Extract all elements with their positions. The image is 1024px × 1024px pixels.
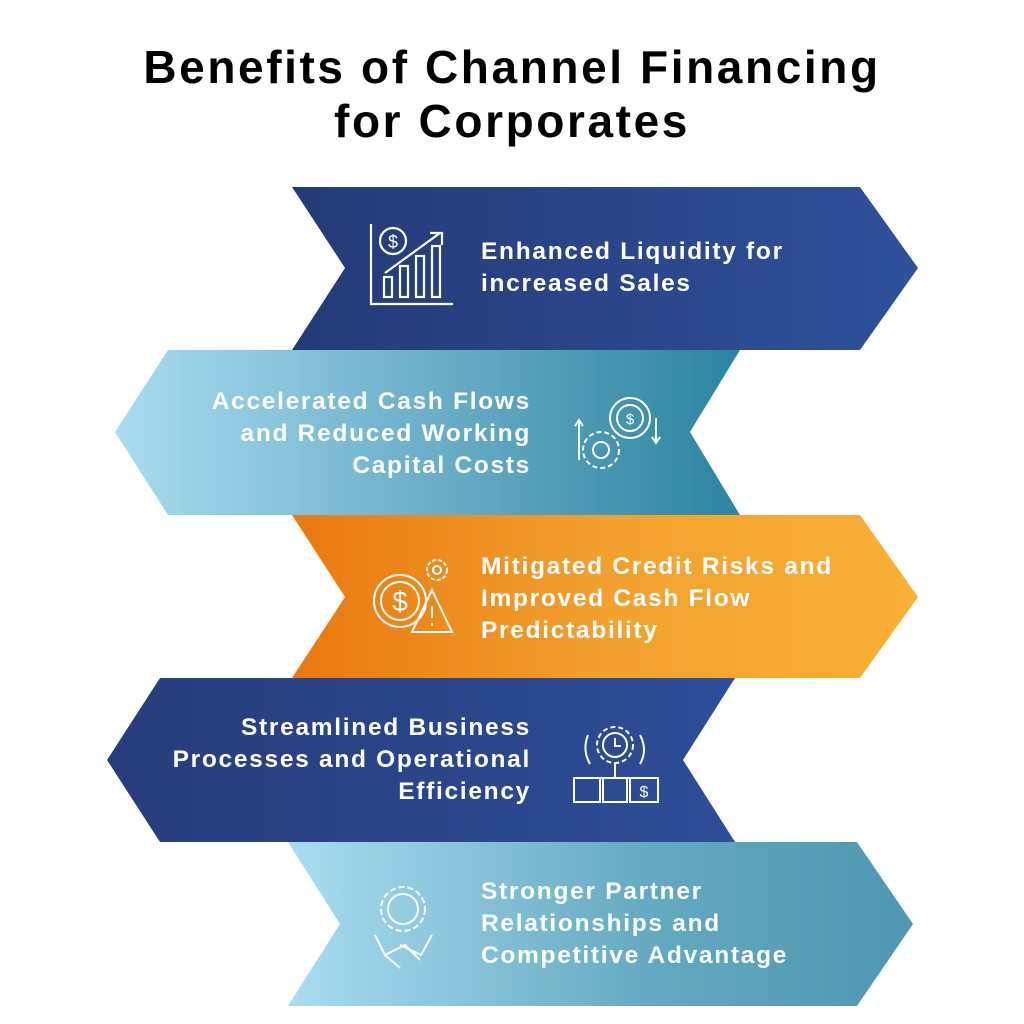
band 2 — [115, 350, 740, 515]
text: band 4: Efficiency — [398, 778, 531, 805]
text: band 4: Streamlined Business — [241, 714, 531, 741]
text: band 3: Predictability — [481, 617, 659, 644]
text: band 2: Accelerated Cash Flows — [212, 388, 531, 415]
text: band 2: and Reduced Working — [241, 420, 531, 447]
icon: chart — [371, 224, 453, 304]
icon: gears cycle: $ — [626, 411, 635, 428]
text: band 5: Stronger Partner — [481, 878, 703, 905]
text: band 5: Relationships and — [481, 910, 721, 937]
icon: process — [574, 727, 658, 802]
icon: process: $ — [640, 784, 649, 801]
title — [143, 41, 881, 147]
text: band 1 — [481, 238, 784, 297]
text: band 3 — [481, 553, 833, 644]
icon: gears cycle — [575, 398, 660, 468]
title: for Corporates — [334, 95, 690, 147]
band 5 — [288, 842, 913, 1006]
band 1 — [292, 187, 918, 350]
icon: money risk — [374, 560, 452, 632]
band 3 — [292, 515, 918, 678]
icon: partnership — [375, 887, 432, 968]
text: band 3: Mitigated Credit Risks and — [481, 553, 833, 580]
text: band 5: Competitive Advantage — [481, 942, 788, 969]
text: band 2: Capital Costs — [352, 452, 531, 479]
text: band 1: Enhanced Liquidity for — [481, 238, 784, 265]
icon: money risk: $ — [392, 586, 408, 617]
text: band 2 — [212, 388, 531, 479]
text: band 1: increased Sales — [481, 270, 692, 297]
text: band 5 — [481, 878, 788, 969]
title: Benefits of Channel Financing — [143, 41, 881, 93]
band 4 — [107, 678, 735, 842]
text: band 3: Improved Cash Flow — [481, 585, 751, 612]
text: band 4: Processes and Operational — [173, 746, 531, 773]
text: band 4 — [173, 714, 531, 805]
icon: chart: $ — [388, 232, 398, 252]
